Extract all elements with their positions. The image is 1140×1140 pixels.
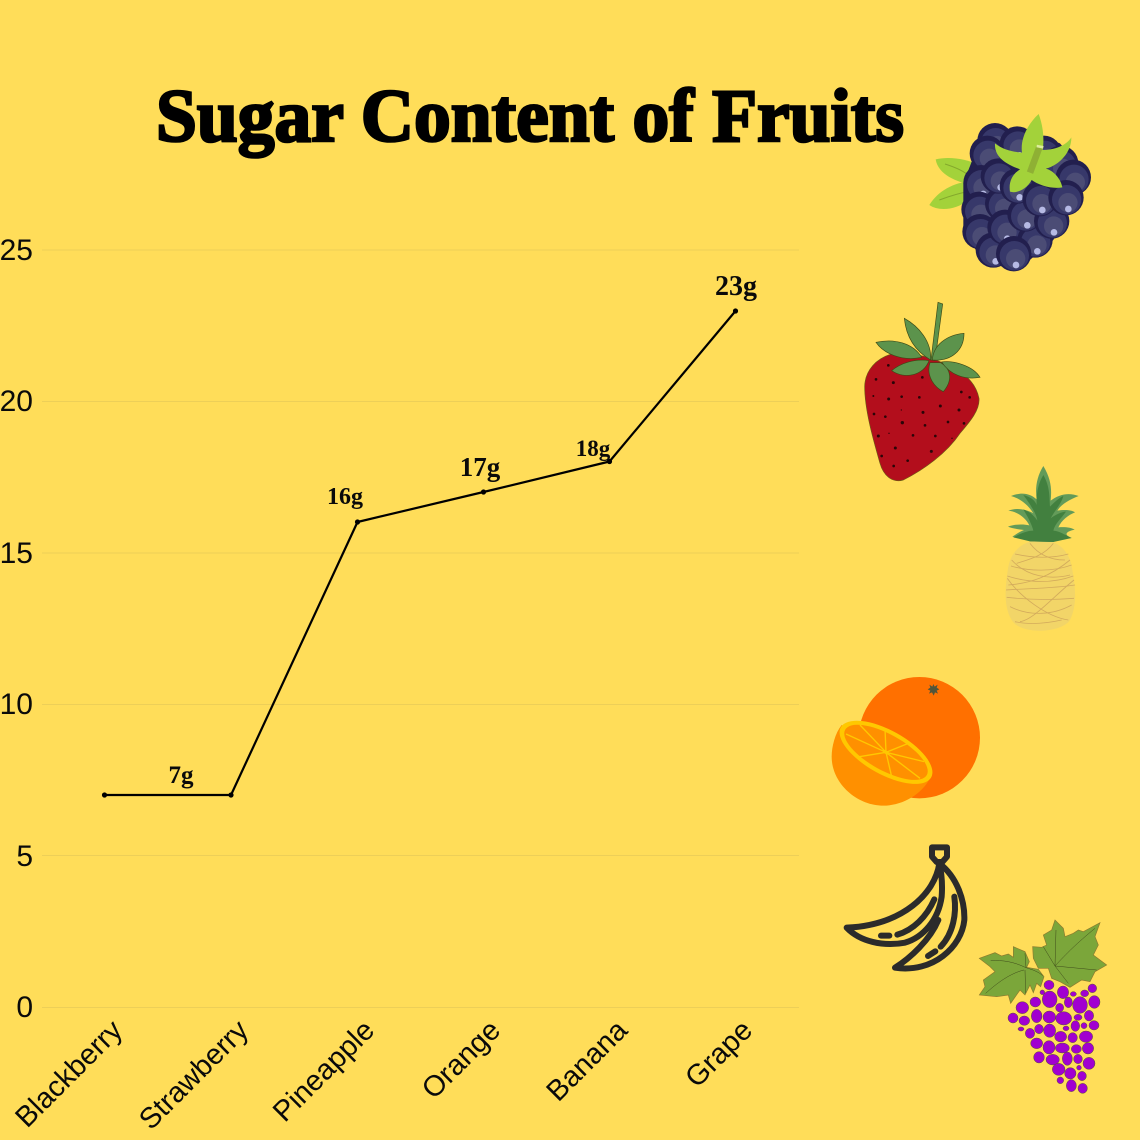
- blackberry side leaves: [929, 158, 977, 209]
- icon: orange: [830, 677, 980, 806]
- x axis category labels: Blackberry: [9, 1014, 129, 1134]
- halved orange: [830, 708, 942, 806]
- grape leaves: [979, 920, 1107, 1003]
- data value labels: 18g: [576, 436, 611, 461]
- x axis category labels: Banana: [541, 1014, 635, 1108]
- x axis category labels: Strawberry: [133, 1014, 255, 1136]
- title: Sugar Content of Fruits: [156, 75, 904, 158]
- blackberry calyx: [995, 114, 1071, 192]
- y axis labels: [0, 234, 33, 1024]
- grape leaf veins: [986, 928, 1097, 993]
- x axis category labels: Orange: [416, 1014, 507, 1105]
- icon: grapes: [979, 920, 1107, 1093]
- y axis labels: 25: [0, 234, 33, 267]
- data value labels: 7g: [168, 762, 194, 789]
- pineapple body: [1006, 540, 1075, 631]
- data value labels: 16g: [327, 484, 363, 510]
- y axis labels: 5: [16, 840, 33, 873]
- x axis category labels: [9, 1014, 759, 1136]
- data value labels: 17g: [460, 452, 501, 482]
- icon: banana: [847, 847, 964, 968]
- blackberry drupelets: [961, 123, 1091, 271]
- icon: blackberry: [929, 114, 1091, 271]
- data line: [104, 311, 736, 795]
- y axis labels: 10: [0, 688, 33, 721]
- data points: [102, 308, 738, 798]
- data value labels: [168, 271, 757, 789]
- y axis labels: 15: [0, 537, 33, 570]
- orange navel: [928, 684, 939, 696]
- x axis category labels: Pineapple: [267, 1014, 381, 1128]
- pineapple crown: [1008, 466, 1079, 542]
- y axis labels: 0: [16, 991, 33, 1024]
- y axis labels: 20: [0, 385, 33, 418]
- pineapple scale pattern: [1006, 543, 1075, 623]
- strawberry body: [865, 353, 979, 481]
- icon: strawberry: [865, 302, 980, 481]
- strawberry leaves and stem: [876, 302, 980, 392]
- data value labels: 23g: [715, 271, 757, 302]
- strawberry seeds: [872, 364, 971, 467]
- x axis category labels: Grape: [679, 1014, 759, 1094]
- whole orange: [859, 677, 980, 798]
- icon: pineapple: [1006, 466, 1079, 631]
- line chart: [0, 234, 799, 1136]
- grape berries: [1008, 980, 1100, 1093]
